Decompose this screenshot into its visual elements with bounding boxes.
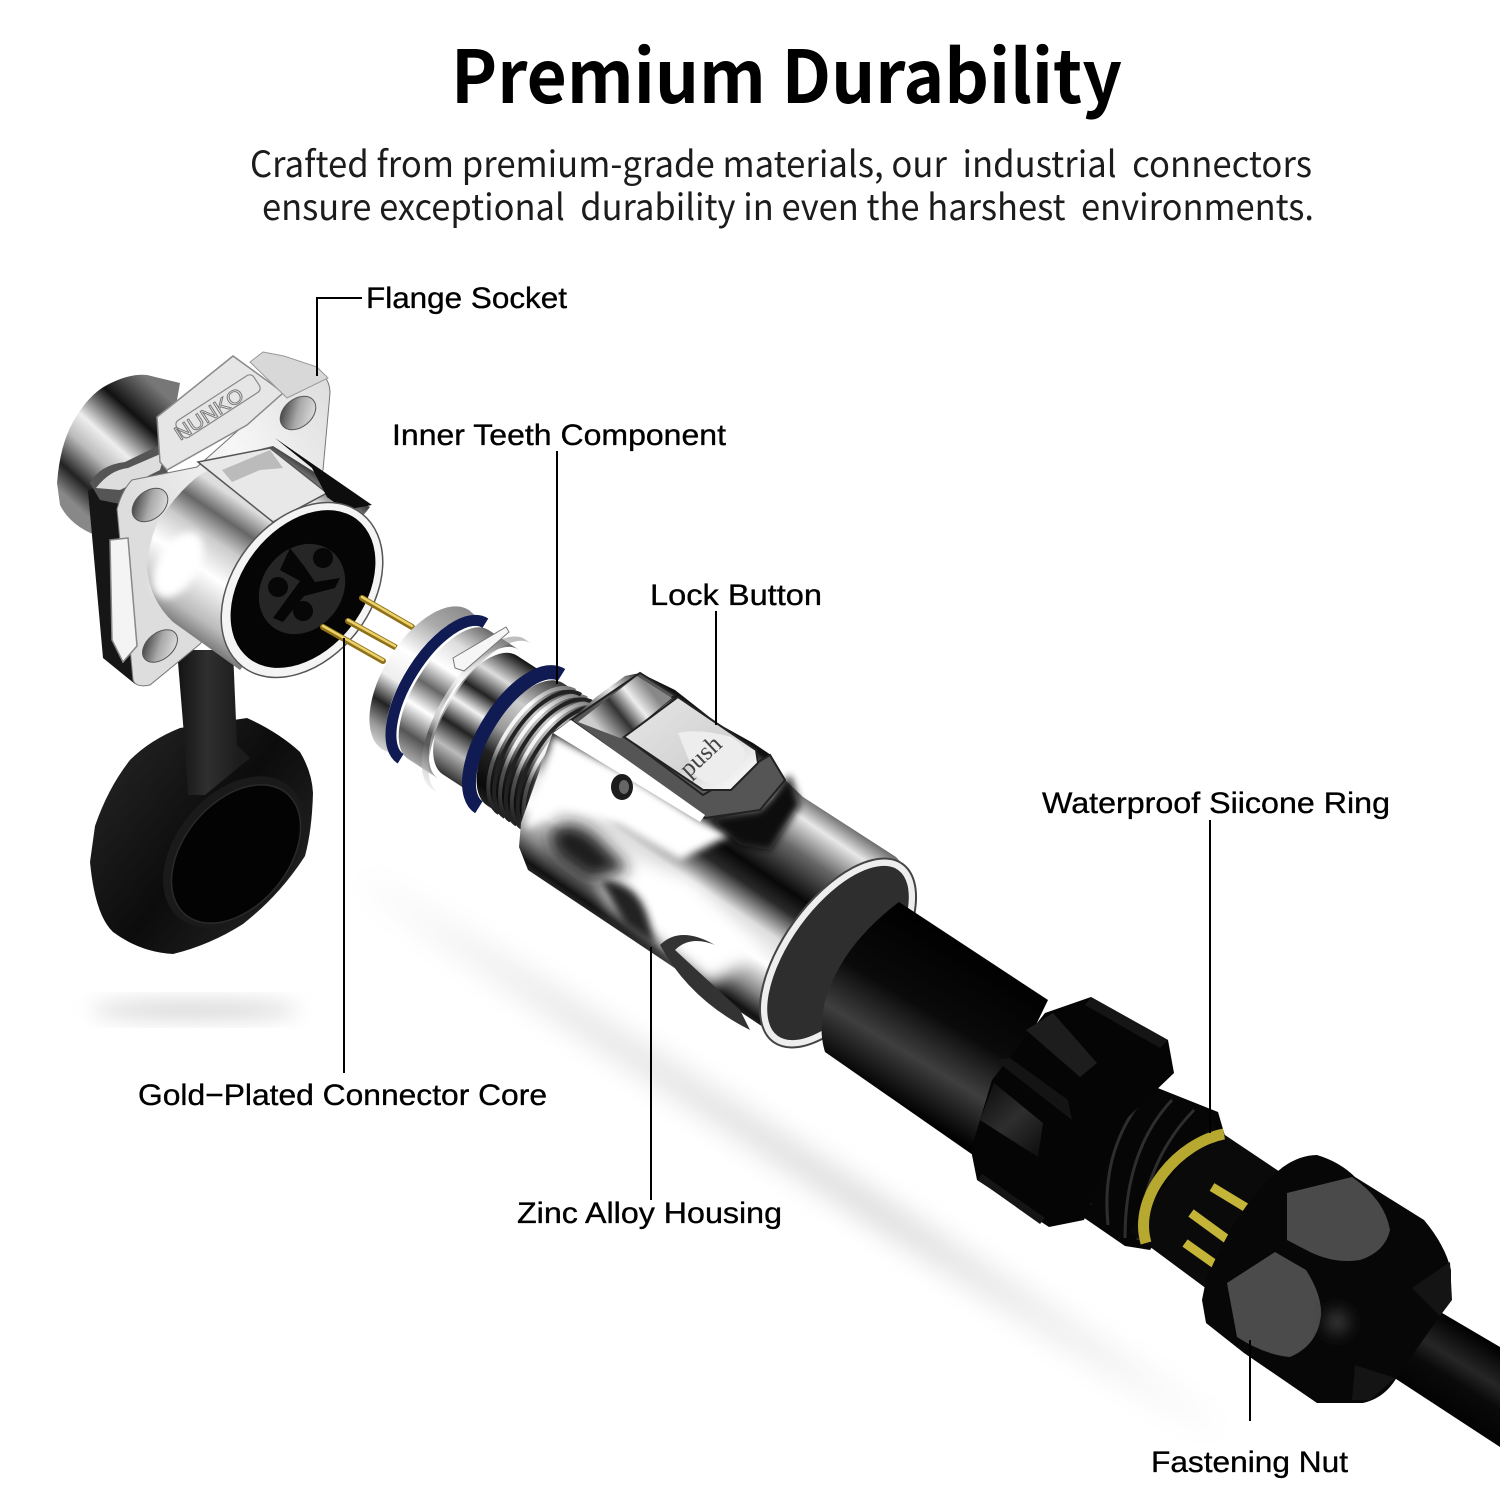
retaining disc xyxy=(400,619,532,793)
end ring xyxy=(735,838,941,1068)
label: flange socket xyxy=(317,282,568,376)
logo outline xyxy=(174,373,262,440)
diagonal floor shadow xyxy=(355,875,1225,1435)
flange plate xyxy=(117,372,330,686)
logo text: NUNKO xyxy=(171,384,248,445)
label: waterproof silicone ring: Waterproof Siicone Ring xyxy=(1042,787,1390,820)
hex coupling nut xyxy=(971,997,1174,1227)
nut upper facet xyxy=(1287,1177,1390,1261)
contact holes xyxy=(268,548,333,621)
cable xyxy=(1390,1300,1500,1447)
lock button xyxy=(624,697,758,790)
insert divider xyxy=(273,548,340,622)
fastening nut xyxy=(1202,1155,1452,1403)
subtitle xyxy=(250,136,1314,231)
barrel slot xyxy=(198,448,327,522)
nut lower facet xyxy=(1227,1252,1321,1357)
lock bracket xyxy=(571,673,785,818)
back block xyxy=(88,470,140,684)
barrel highlight xyxy=(143,524,213,606)
label: fastening nut: Fastening Nut xyxy=(1151,1446,1349,1479)
subtitle: Crafted from premium-grade materials, our industrial connectors xyxy=(250,136,1312,188)
blue seal one xyxy=(370,604,485,759)
lock button assembly xyxy=(553,673,785,822)
dark swoosh xyxy=(600,880,655,945)
black rear sleeve xyxy=(822,902,1048,1155)
push pad xyxy=(678,731,745,784)
waterproof silicone ring xyxy=(1144,1134,1224,1243)
nut glow xyxy=(1325,1310,1349,1334)
threaded neck xyxy=(1080,1065,1225,1250)
groove xyxy=(414,637,552,797)
nut facets xyxy=(980,1083,1043,1157)
label: inner teeth component: Inner Teeth Component xyxy=(392,419,727,452)
bright upper sheen xyxy=(525,735,730,860)
side screw xyxy=(611,774,633,800)
label: lock button: Lock Button xyxy=(650,579,822,612)
upper chrome band xyxy=(90,445,170,505)
hinge xyxy=(578,676,672,738)
title: Premium Durability xyxy=(451,19,1122,125)
contact insert xyxy=(241,527,363,651)
lock recess shadow xyxy=(710,775,800,850)
left bevel xyxy=(110,538,137,662)
push text: push xyxy=(674,730,728,782)
label: gold-plated connector core: Gold−Plated Connector Core xyxy=(138,1079,547,1112)
label: zinc alloy housing: Zinc Alloy Housing xyxy=(517,1197,782,1230)
blue seal two xyxy=(449,655,562,807)
icon: dust cap xyxy=(90,650,334,955)
socket face ring xyxy=(188,471,416,709)
zinc alloy housing xyxy=(519,673,946,1074)
floor shadow under cap xyxy=(90,1001,300,1019)
gland rims xyxy=(1412,1262,1452,1316)
socket opening xyxy=(201,482,405,696)
cap recess xyxy=(134,749,334,955)
thread xyxy=(457,664,662,869)
rear cylinder xyxy=(57,375,180,535)
plug front collar xyxy=(344,582,670,883)
dark blur xyxy=(548,824,630,880)
subtitle: ensure exceptional durability in even the harshest environments. xyxy=(262,179,1314,231)
rear gold contacts xyxy=(1185,1187,1250,1265)
top dark edge xyxy=(275,438,372,510)
mid band xyxy=(379,611,519,778)
housing body xyxy=(519,673,910,1044)
key slot xyxy=(453,627,509,671)
label: flange socket: Flange Socket xyxy=(366,282,568,315)
logo recess xyxy=(660,935,750,1030)
logo plate xyxy=(157,356,283,470)
icon: flange socket xyxy=(57,352,416,709)
mid white sheen xyxy=(590,850,760,985)
nose xyxy=(347,587,481,757)
inner contact body xyxy=(1130,1125,1295,1295)
cap strap xyxy=(177,650,250,795)
barrel xyxy=(147,446,370,670)
cap body xyxy=(90,718,313,954)
mounting holes xyxy=(126,389,322,669)
gold pins xyxy=(323,597,412,661)
